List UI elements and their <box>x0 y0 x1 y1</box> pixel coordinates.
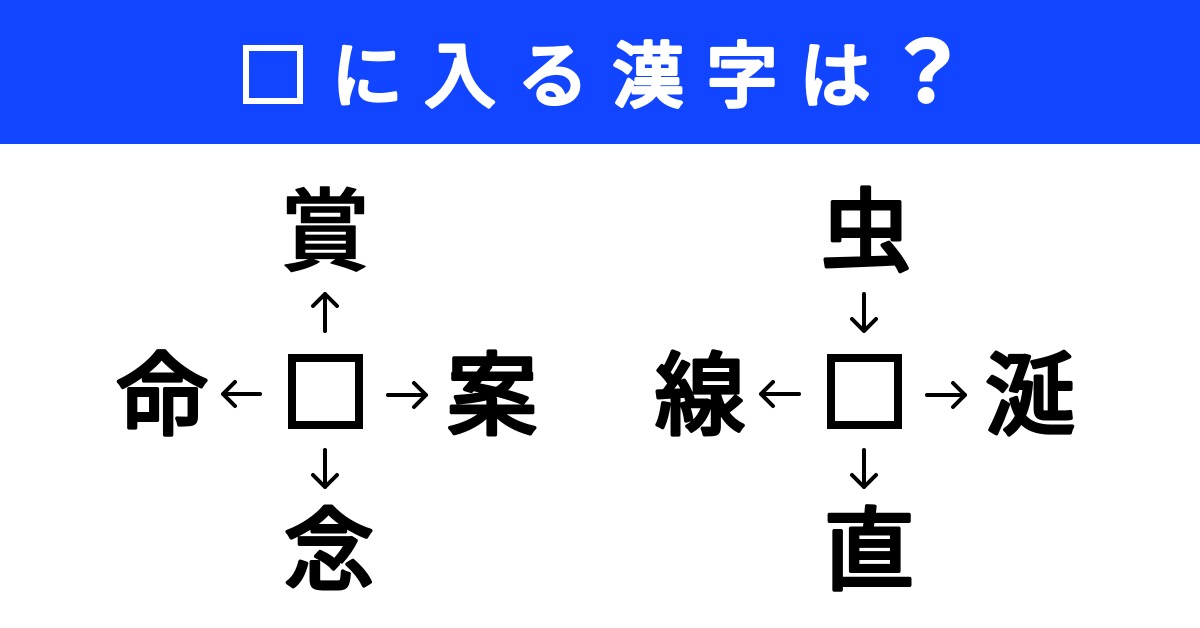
title text <box>246 26 969 120</box>
kanji: bottom: 念 <box>284 502 374 602</box>
title text: 入 <box>424 38 496 117</box>
arrow: down <box>852 450 876 487</box>
puzzle: right <box>655 183 1075 602</box>
blank square <box>831 358 898 425</box>
title text: 漢 <box>612 38 684 117</box>
kanji: top: 賞 <box>280 183 370 283</box>
arrow: up <box>313 294 337 331</box>
title text: る <box>517 38 589 117</box>
kanji: left: 線 <box>655 347 745 447</box>
arrow: left <box>223 382 260 406</box>
arrow: down <box>852 294 876 331</box>
kanji: left: 命 <box>117 347 207 447</box>
title text: は <box>799 38 871 117</box>
arrow: right <box>388 383 426 407</box>
kanji: top: 虫 <box>821 183 911 283</box>
title text: 字 <box>706 38 778 117</box>
arrow: left <box>761 382 799 406</box>
arrow: down <box>313 450 337 487</box>
title banner <box>0 0 1200 144</box>
kanji: bottom: 直 <box>824 502 914 602</box>
kanji: right: 涎 <box>985 347 1075 447</box>
title text: に <box>331 38 403 117</box>
arrow: right <box>927 383 965 407</box>
puzzle: left <box>117 183 537 602</box>
title text: ？ <box>885 26 969 120</box>
kanji: right: 案 <box>447 347 537 447</box>
blank square <box>292 358 359 425</box>
